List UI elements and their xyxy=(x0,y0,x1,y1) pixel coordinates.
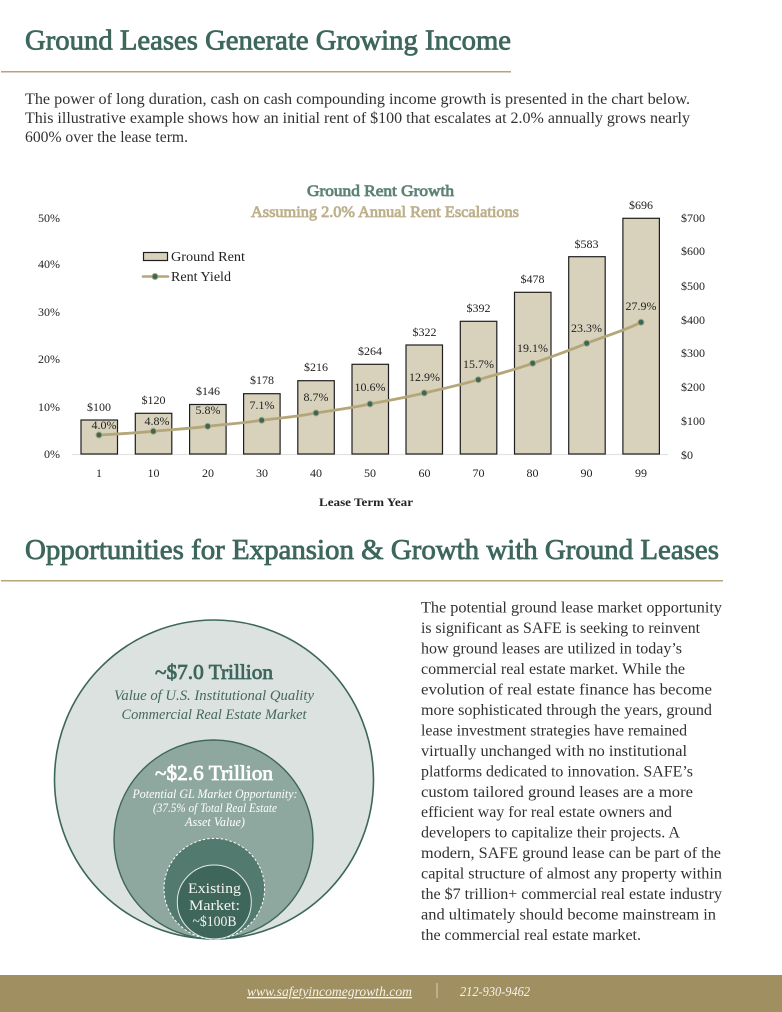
text block: intro paragraph: The power of long duration, cash on cash compounding income growth is presented in the chart below. xyxy=(25,91,690,108)
yield value labels: 27.9% xyxy=(626,299,656,313)
circle: total market xyxy=(54,620,374,939)
bar value labels: $178 xyxy=(250,373,274,387)
right axis: ground rent: $600 xyxy=(681,244,705,258)
text block: intro paragraph: This illustrative example shows how an initial rent of $100 that escalates at 2.0% annually grows nearly xyxy=(25,110,690,127)
circle: dashed ring xyxy=(164,838,265,939)
line: rent yield xyxy=(96,319,644,438)
x axis labels: 10 xyxy=(148,466,160,480)
text block: market opportunity paragraph: efficient way for real estate owners and xyxy=(421,804,672,821)
right axis: ground rent: $100 xyxy=(681,414,705,428)
bars: ground rent xyxy=(81,218,659,454)
x axis labels: 40 xyxy=(310,466,322,480)
x axis labels: 99 xyxy=(635,466,647,480)
left axis: rent yield: 0% xyxy=(44,447,60,461)
bar value labels: $216 xyxy=(304,360,328,374)
text block: market opportunity paragraph: virtually unchanged with no institutional xyxy=(421,743,687,760)
text block: market opportunity paragraph: and ultimately should become mainstream in xyxy=(421,906,716,924)
circle: existing market: Existing xyxy=(188,881,242,897)
text block: market opportunity paragraph xyxy=(421,600,722,944)
x axis labels: 80 xyxy=(526,466,538,480)
left axis: rent yield: 50% xyxy=(38,211,60,225)
text block: market opportunity paragraph: The potential ground lease market opportunity xyxy=(421,600,722,617)
right axis: ground rent: $300 xyxy=(681,346,705,360)
yield value labels: 8.7% xyxy=(304,390,328,404)
left axis: rent yield: 30% xyxy=(38,305,60,319)
yield value labels: 12.9% xyxy=(409,370,440,384)
right axis: ground rent: $400 xyxy=(681,313,705,327)
text block: market opportunity paragraph: capital structure of almost any property within xyxy=(421,866,722,883)
x axis labels: 1 xyxy=(96,466,102,480)
footer phone: 212-930-9462 xyxy=(460,985,530,1000)
text block: market opportunity paragraph: the commercial real estate market. xyxy=(421,927,641,944)
circle: total market: ~$7.0 Trillion xyxy=(155,660,274,684)
yield value labels: 4.8% xyxy=(144,414,170,428)
circle: potential ground lease market: Potential GL Market Opportunity: xyxy=(132,787,298,801)
legend xyxy=(143,249,245,284)
circle: potential ground lease market: Asset Value) xyxy=(184,815,245,829)
circle: existing market: ~$100B xyxy=(192,914,236,930)
bar value labels: $322 xyxy=(412,325,436,339)
yield value labels: 23.3% xyxy=(571,321,602,335)
text block: market opportunity paragraph: is significant as SAFE is seeking to reinvent xyxy=(421,620,701,637)
text block: market opportunity paragraph: lease investment strategies have remained xyxy=(421,722,687,739)
circle: existing market xyxy=(177,865,251,939)
heading: ground leases generate growing income: Ground Leases Generate Growing Income xyxy=(25,24,511,56)
circle: existing market: Market: xyxy=(189,898,240,914)
footer bar xyxy=(0,975,782,1012)
x axis labels xyxy=(96,466,647,480)
left axis: rent yield: 20% xyxy=(38,352,60,366)
chart title: Ground Rent Growth xyxy=(307,183,454,200)
text block: market opportunity paragraph: platforms dedicated to innovation. SAFE’s xyxy=(421,763,693,780)
yield value labels: 10.6% xyxy=(354,380,386,394)
left axis: rent yield xyxy=(38,211,60,461)
text block: market opportunity paragraph: how ground leases are utilized in today’s xyxy=(421,641,682,658)
chart title: Assuming 2.0% Annual Rent Escalations xyxy=(251,204,519,221)
x axis labels: 20 xyxy=(202,466,214,480)
right axis: ground rent: $0 xyxy=(681,448,693,462)
x axis labels: 30 xyxy=(256,466,268,480)
yield value labels: 15.7% xyxy=(463,357,494,371)
chart title xyxy=(251,183,519,221)
text block: intro paragraph xyxy=(25,91,690,146)
bar value labels xyxy=(87,198,653,414)
yield value labels: 19.1% xyxy=(517,341,548,355)
text block: market opportunity paragraph: more sophisticated through the years, ground xyxy=(421,702,712,719)
yield value labels: 7.1% xyxy=(250,398,274,412)
circle: potential ground lease market xyxy=(114,740,313,939)
text block: market opportunity paragraph: evolution of real estate finance has become xyxy=(421,682,712,698)
circle: potential ground lease market: (37.5% of Total Real Estate xyxy=(153,801,277,815)
text block: market opportunity paragraph: commercial real estate market. While the xyxy=(421,661,685,678)
x axis labels: 60 xyxy=(418,466,430,480)
right axis: ground rent: $500 xyxy=(681,279,705,293)
x axis labels: 50 xyxy=(364,466,376,480)
circle: potential ground lease market: ~$2.6 Trillion xyxy=(155,761,274,785)
text block: market opportunity paragraph: the $7 trillion+ commercial real estate industry xyxy=(421,886,722,903)
chart: ground rent growth xyxy=(38,183,705,509)
legend: Rent Yield xyxy=(171,269,231,284)
right axis: ground rent xyxy=(681,211,705,462)
bar value labels: $583 xyxy=(574,237,598,251)
x axis title: Lease Term Year xyxy=(319,495,414,509)
left axis: rent yield: 10% xyxy=(38,400,60,414)
legend: Ground Rent xyxy=(171,249,245,264)
text block: market opportunity paragraph: developers to capitalize their projects. A xyxy=(421,825,681,842)
bar value labels: $100 xyxy=(87,400,111,414)
x axis labels: 70 xyxy=(472,466,484,480)
circle: total market: Commercial Real Estate Market xyxy=(122,707,307,723)
left axis: rent yield: 40% xyxy=(38,257,60,271)
text block: intro paragraph: 600% over the lease term. xyxy=(25,129,188,146)
right axis: ground rent: $700 xyxy=(681,211,705,225)
bar value labels: $146 xyxy=(196,384,220,398)
circle: total market: Value of U.S. Institutional Quality xyxy=(114,688,314,704)
text block: market opportunity paragraph: modern, SAFE ground lease can be part of the xyxy=(421,845,721,862)
nested circles: market size xyxy=(54,620,374,939)
bar value labels: $264 xyxy=(358,344,382,358)
yield value labels xyxy=(92,299,656,432)
bar value labels: $696 xyxy=(629,198,653,212)
text block: market opportunity paragraph: custom tailored ground leases are a more xyxy=(421,784,693,801)
x axis labels: 90 xyxy=(580,466,592,480)
bar value labels: $120 xyxy=(142,393,166,407)
yield value labels: 4.0% xyxy=(92,418,116,432)
right axis: ground rent: $200 xyxy=(681,380,705,394)
heading: opportunities for expansion: Opportunities for Expansion & Growth with Ground Leases xyxy=(25,534,719,566)
footer website: www.safetyincomegrowth.com xyxy=(247,985,412,1000)
bar value labels: $478 xyxy=(520,272,544,286)
yield value labels: 5.8% xyxy=(196,403,220,417)
bar value labels: $392 xyxy=(466,301,490,315)
